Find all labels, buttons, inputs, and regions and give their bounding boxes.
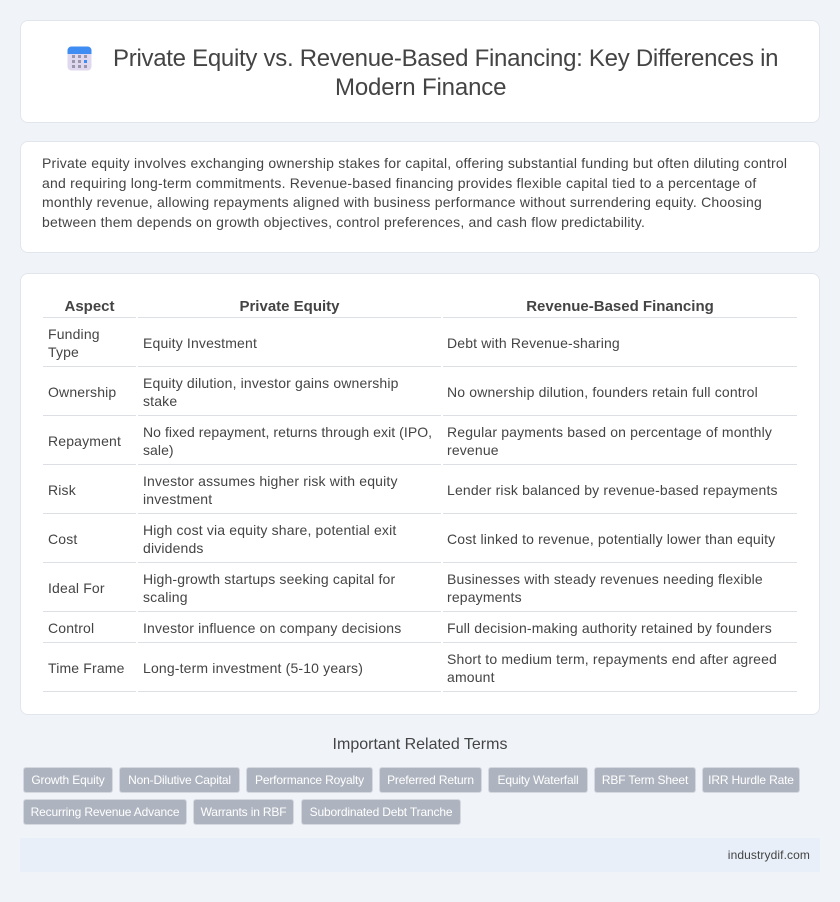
Private Equity: ownership: stake [143, 393, 177, 409]
intro paragraph: between them depends on growth objectives, control preferences, and cash flow predictability. [42, 214, 645, 230]
row: Ideal For: Ideal For [48, 580, 105, 596]
Private Equity: control: Investor influence on company decisions [143, 620, 401, 636]
related terms tags: Recurring Revenue Advance [31, 805, 179, 819]
row: Risk: Risk [48, 482, 76, 498]
table header: Revenue-Based Financing: Revenue-Based Financing [526, 298, 714, 315]
footer bar [20, 838, 820, 872]
row: Control: Control [48, 620, 94, 636]
intro paragraph [42, 155, 787, 230]
title: Modern Finance [335, 74, 506, 101]
Private Equity: time frame: Long-term investment (5-10 years) [143, 660, 363, 676]
related terms tags: RBF Term Sheet [602, 773, 688, 787]
intro text panel [20, 141, 820, 253]
related terms heading: Important Related Terms [333, 736, 507, 753]
Private Equity: risk: Investor assumes higher risk with equity [143, 473, 398, 489]
header panel [20, 20, 820, 123]
Private Equity: ideal for: scaling [143, 589, 188, 605]
RBF: control: Full decision-making authority retained by founders [447, 620, 772, 636]
RBF: repayment: revenue [447, 442, 499, 458]
Private Equity: cost: High cost via equity share, potential exit [143, 522, 396, 538]
related terms tags: Equity Waterfall [497, 773, 579, 787]
RBF: repayment: Regular payments based on percentage of monthly [447, 424, 772, 440]
RBF: ideal for [447, 571, 763, 605]
row: Repayment: Repayment [48, 433, 121, 449]
RBF: funding type: Debt with Revenue-sharing [447, 335, 620, 351]
row: Funding Type [48, 326, 100, 360]
related terms tags: Subordinated Debt Tranche [310, 805, 452, 819]
Private Equity: ideal for [143, 571, 395, 605]
RBF: time frame [447, 651, 777, 685]
intro paragraph: Private equity involves exchanging ownership stakes for capital, offering substantial funding but often diluting control [42, 155, 787, 171]
RBF: repayment [447, 424, 772, 458]
Private Equity: repayment: sale) [143, 442, 174, 458]
related terms tags: Preferred Return [387, 773, 474, 787]
row: Funding Type: Type [48, 344, 79, 360]
Private Equity: cost: dividends [143, 540, 204, 556]
title [113, 45, 778, 101]
RBF: risk: Lender risk balanced by revenue-based repayments [447, 482, 778, 498]
title: Private Equity vs. Revenue-Based Financing: Key Differences in [113, 45, 778, 72]
comparison table panel [20, 273, 820, 715]
related terms tags: Warrants in RBF [201, 805, 286, 819]
RBF: ideal for: Businesses with steady revenues needing flexible [447, 571, 763, 587]
row: Cost: Cost [48, 531, 77, 547]
Private Equity: repayment: No fixed repayment, returns through exit (IPO, [143, 424, 432, 440]
Private Equity: ideal for: High-growth startups seeking capital for [143, 571, 395, 587]
RBF: time frame: Short to medium term, repayments end after agreed [447, 651, 777, 667]
Private Equity: ownership: Equity dilution, investor gains ownership [143, 375, 399, 391]
RBF: cost: Cost linked to revenue, potentially lower than equity [447, 531, 775, 547]
related terms tags: IRR Hurdle Rate [708, 773, 794, 787]
related terms tags: Growth Equity [31, 773, 105, 787]
row: Time Frame: Time Frame [48, 660, 125, 676]
Private Equity: ownership [143, 375, 399, 409]
Private Equity: risk [143, 473, 398, 507]
row: Ownership: Ownership [48, 384, 116, 400]
Private Equity: funding type: Equity Investment [143, 335, 257, 351]
RBF: ideal for: repayments [447, 589, 522, 605]
icon: calendar [68, 46, 92, 70]
RBF: time frame: amount [447, 669, 495, 685]
related terms tags: Non-Dilutive Capital [128, 773, 231, 787]
related terms tags: Performance Royalty [255, 773, 364, 787]
RBF: ownership: No ownership dilution, founders retain full control [447, 384, 758, 400]
Private Equity: repayment [143, 424, 432, 458]
table header: Aspect: Aspect [64, 298, 115, 315]
table header: Private Equity: Private Equity [239, 298, 340, 315]
intro paragraph: monthly revenue, allowing repayments aligned with business performance without surrendering equity. Choosing [42, 194, 762, 210]
row: Funding Type: Funding [48, 326, 100, 342]
intro paragraph: and requiring long-term commitments. Revenue-based financing provides flexible capital tied to a percentage of [42, 174, 756, 190]
Private Equity: cost [143, 522, 396, 556]
Private Equity: risk: investment [143, 491, 212, 507]
footer source text: industrydif.com [728, 848, 810, 862]
